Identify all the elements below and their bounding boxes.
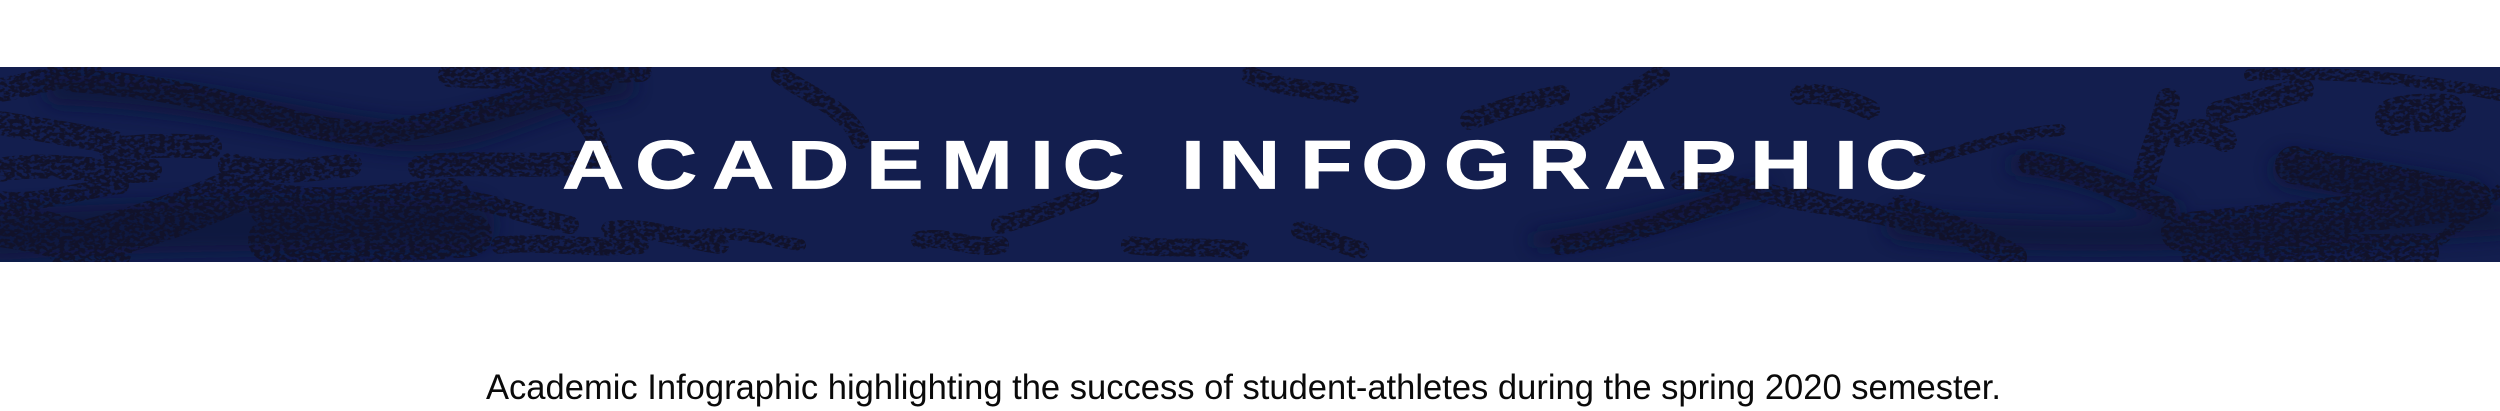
- banner texture: dark brush streaks: [0, 70, 2500, 257]
- banner: navy textured band: [0, 67, 2500, 262]
- banner background: [0, 67, 2500, 262]
- description text: Academic Infographic highlighting the success of student-athletes during the spring 2020 semester.: [486, 368, 2001, 407]
- banner shading: soft dark masses: [0, 85, 2500, 240]
- title: ACADEMIC INFOGRAPHIC: [562, 126, 1927, 204]
